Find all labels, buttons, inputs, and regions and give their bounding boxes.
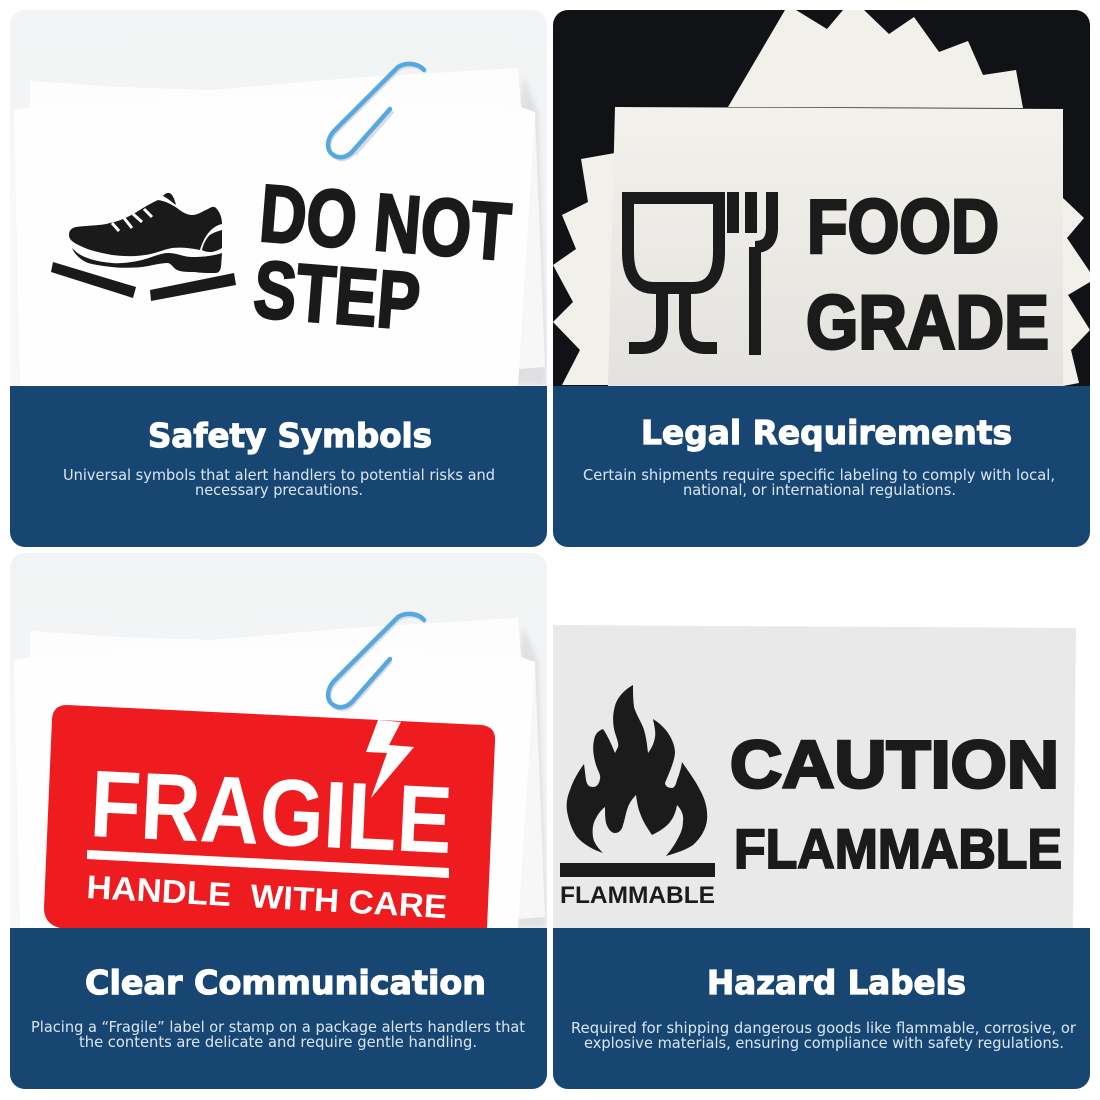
caption block: hazard labels — [553, 928, 1090, 1089]
icon: lightning bolt — [366, 720, 414, 798]
caption block: clear communication: Clear Communication — [85, 963, 486, 1002]
panel: hazard labels — [553, 625, 1090, 1089]
icon: blue paperclip — [328, 614, 426, 710]
label text: caution flammable: FLAMMABLE — [734, 817, 1062, 880]
panel: legal requirements — [553, 10, 1090, 547]
label text: fragile handle with care: FRAGILE — [88, 751, 455, 874]
label text: do not step — [254, 184, 513, 329]
grey label card — [553, 625, 1076, 928]
caption block: hazard labels: explosive materials, ensuring compliance with safety regulations. — [584, 1034, 1064, 1052]
label text: fragile handle with care: HANDLE WITH CARE — [86, 868, 448, 925]
caption block: safety symbols — [10, 386, 547, 547]
caption block: safety symbols: Safety Symbols — [148, 416, 432, 455]
caption block: hazard labels: Hazard Labels — [707, 963, 966, 1002]
caption block: clear communication — [10, 928, 547, 1089]
caption block: legal requirements — [553, 386, 1090, 547]
icon: blue paperclip — [328, 64, 426, 160]
paper stack — [10, 68, 547, 386]
caption block: hazard labels: Required for shipping dangerous goods like flammable, corrosive, or — [571, 1019, 1077, 1037]
label text: caution flammable: CAUTION — [730, 728, 1059, 802]
panel: safety symbols — [10, 10, 547, 547]
fanned paper sheets — [553, 10, 1090, 386]
caption block: safety symbols: Universal symbols that alert handlers to potential risks and — [63, 466, 495, 484]
caption block: clear communication: Placing a “Fragile” label or stamp on a package alerts handlers that — [31, 1018, 525, 1036]
icon: flame — [567, 685, 707, 856]
paper stack — [10, 618, 547, 928]
panel: clear communication — [10, 553, 547, 1089]
caption block: legal requirements: Certain shipments require specific labeling to comply with local, — [583, 466, 1055, 484]
flame symbol base bar and caption — [560, 863, 715, 903]
label text: food grade: GRADE — [806, 280, 1049, 366]
label text: food grade: FOOD — [807, 184, 999, 270]
caption block: safety symbols: necessary precautions. — [195, 481, 363, 499]
label text: do not step: STEP — [251, 245, 423, 347]
red fragile sticker — [44, 705, 495, 928]
caption block: clear communication: the contents are delicate and require gentle handling. — [79, 1033, 477, 1051]
label text: food grade — [807, 198, 1048, 350]
caption block: legal requirements: Legal Requirements — [641, 413, 1012, 452]
flame symbol base bar and caption: FLAMMABLE — [560, 882, 715, 909]
label text: caution flammable — [731, 739, 1061, 869]
label text: fragile handle with care — [87, 771, 449, 918]
label text: do not step: DO NOT — [257, 169, 514, 278]
main label card — [608, 107, 1063, 386]
icon: shoe do not step — [51, 193, 236, 301]
caption block: legal requirements: national, or international regulations. — [683, 481, 956, 499]
icon: food safe glass and fork — [628, 192, 772, 355]
